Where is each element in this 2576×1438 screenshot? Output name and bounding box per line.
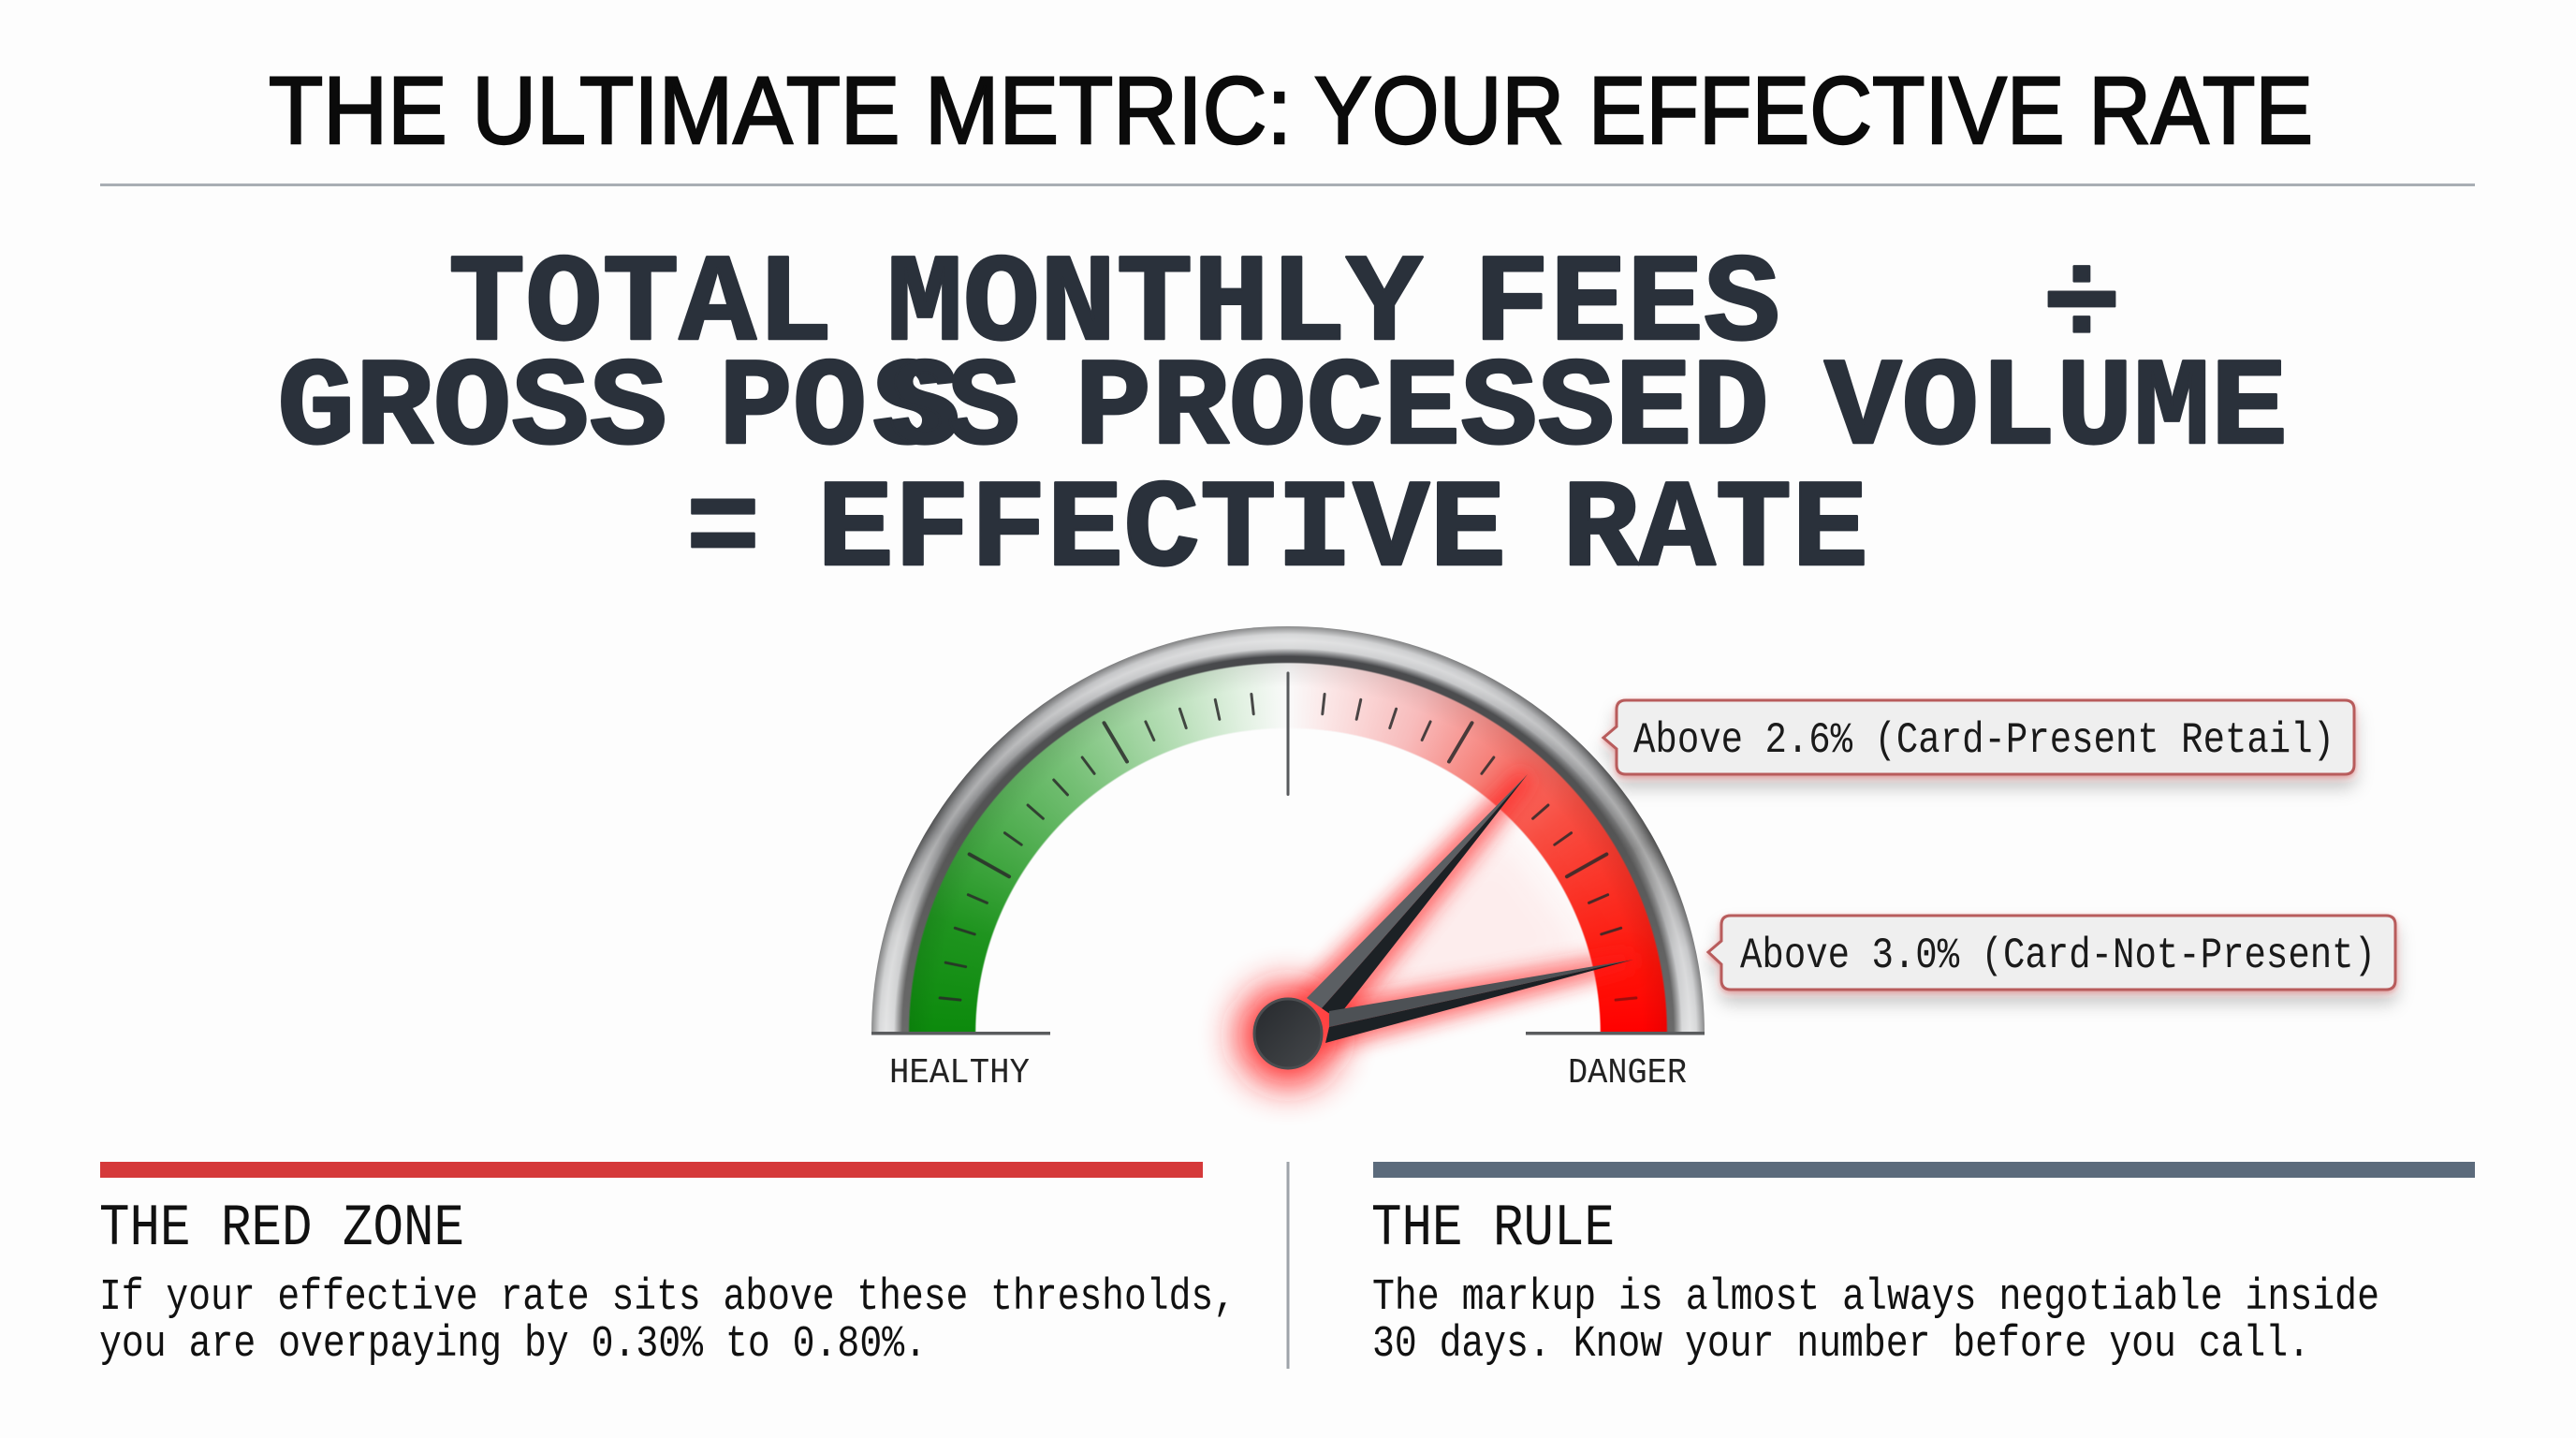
header and formula: [100, 57, 2475, 599]
red accent bar: [100, 1162, 1203, 1178]
formula line 2: gross POS processed volume: S: [889, 339, 960, 480]
panel: the red zone: [99, 1162, 1236, 1370]
colour band: healthy to danger: [908, 663, 1668, 1032]
title: THE ULTIMATE METRIC:: [269, 57, 1292, 164]
formula line 3: equals effective rate: [686, 461, 1868, 602]
formula line 2: gross POS processed volume: PROCESSED: [1075, 339, 1769, 480]
slate accent bar: [1373, 1162, 2475, 1178]
division sign: ÷: [2042, 234, 2121, 383]
formula line 2: gross POS processed volume: GROSS: [277, 339, 667, 480]
tick marks: [940, 673, 1636, 1000]
red glow behind needles: [1237, 774, 1633, 1086]
formula line 2: gross POS processed volume: S: [947, 339, 1020, 480]
heading: the red zone: THE RED ZONE: [99, 1196, 464, 1262]
body text: red zone: you are overpaying by 0.30% to 0.80%.: [99, 1320, 927, 1370]
body text: red zone: If your effective rate sits above these thresholds,: [99, 1273, 1236, 1323]
formula line 3: equals effective rate: EFFECTIVE: [817, 461, 1506, 599]
needle: 3.0% card-not-present: [1325, 960, 1633, 1043]
body text: the rule: 30 days. Know your number before you call.: [1372, 1320, 2310, 1370]
needle: 2.6% card-present: [1307, 774, 1528, 1019]
label: healthy: HEALTHY: [889, 1053, 1030, 1093]
callout: above 3.0%: [1708, 916, 2395, 990]
gauge: [871, 626, 1705, 1114]
label: danger: DANGER: [1568, 1053, 1687, 1093]
callout: above 3.0%: Above 3.0% (Card-Not-Present): [1740, 932, 2376, 980]
gauge dial: [871, 626, 1705, 1032]
formula line 2: gross POS processed volume: [277, 339, 2288, 480]
formula line 1: total monthly fees: [448, 235, 1780, 376]
formula line 1: total monthly fees: TOTAL: [448, 235, 833, 376]
formula line 3: equals effective rate: RATE: [1562, 461, 1868, 599]
dark inner ring: [895, 649, 1681, 1032]
formula: [277, 234, 2288, 602]
baseline right: [1526, 1032, 1705, 1035]
formula line 1: total monthly fees: FEES: [1473, 235, 1780, 376]
title: [269, 57, 2313, 164]
panel: the rule: [1371, 1162, 2475, 1370]
formula line 1: total monthly fees: MONTHLY: [886, 235, 1423, 376]
formula line 2: gross POS processed volume: PO: [719, 339, 867, 480]
callout: above 2.6%: [1603, 700, 2354, 774]
title: YOUR EFFECTIVE RATE: [1314, 57, 2313, 164]
metal bezel: [871, 626, 1705, 1438]
heading: the rule: THE RULE: [1371, 1196, 1615, 1262]
formula line 2: gross POS processed volume: S: [872, 339, 944, 480]
needle hub: [1254, 999, 1322, 1068]
body text: the rule: The markup is almost always negotiable inside: [1372, 1273, 2379, 1323]
callout: above 2.6%: Above 2.6% (Card-Present Retail): [1633, 716, 2334, 765]
formula line 3: equals effective rate: =: [686, 461, 760, 599]
white dial face: [871, 626, 1705, 1438]
baseline left: [871, 1032, 1050, 1035]
formula line 2: gross POS processed volume: VOLUME: [1824, 339, 2288, 480]
body text: the rule: [1372, 1273, 2379, 1370]
body text: red zone: [99, 1273, 1236, 1370]
